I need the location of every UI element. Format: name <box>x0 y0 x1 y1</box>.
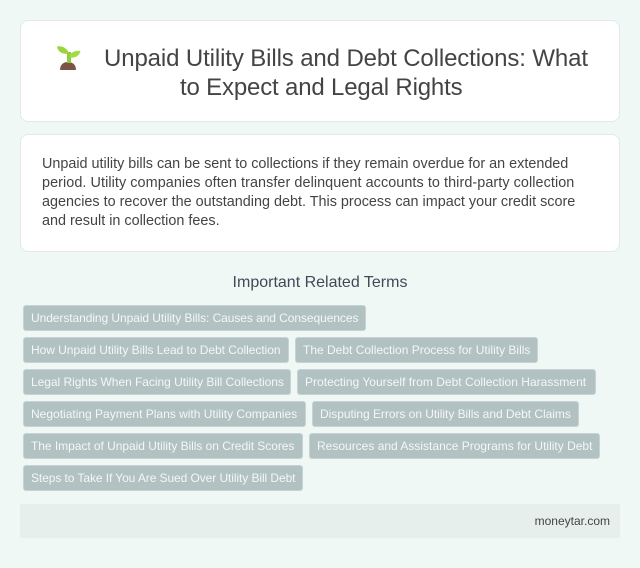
tag: Negotiating Payment Plans with Utility Companies <box>31 407 297 421</box>
icon: seedling <box>57 46 80 70</box>
tag: How Unpaid Utility Bills Lead to Debt Collection <box>31 343 281 357</box>
intro paragraph: period. Utility companies often transfer delinquent accounts to third-party collection <box>42 175 574 191</box>
title text <box>104 45 588 101</box>
tag <box>297 369 596 395</box>
title card <box>20 20 620 122</box>
intro paragraph: and result in collection fees. <box>42 213 220 229</box>
related term tags <box>23 305 600 491</box>
tag: Resources and Assistance Programs for Utility Debt <box>317 439 592 453</box>
tag <box>295 337 538 363</box>
title text: to Expect and Legal Rights <box>180 74 462 101</box>
tag <box>23 401 306 427</box>
tag <box>312 401 579 427</box>
intro paragraph: Unpaid utility bills can be sent to collections if they remain overdue for an extended <box>42 156 568 172</box>
tag: Understanding Unpaid Utility Bills: Causes and Consequences <box>31 311 358 325</box>
tag <box>23 305 366 331</box>
tag <box>23 465 303 491</box>
tag: Steps to Take If You Are Sued Over Utility Bill Debt <box>31 471 295 485</box>
intro paragraph: agencies to recover the outstanding debt. This process can impact your credit score <box>42 194 575 210</box>
tag <box>23 433 303 459</box>
title text: Unpaid Utility Bills and Debt Collections: What <box>104 45 588 72</box>
intro text card <box>20 134 620 252</box>
tag: Disputing Errors on Utility Bills and Debt Claims <box>320 407 571 421</box>
tag <box>23 337 289 363</box>
intro paragraph <box>42 156 575 229</box>
tag: The Debt Collection Process for Utility Bills <box>303 343 530 357</box>
tag: The Impact of Unpaid Utility Bills on Credit Scores <box>31 439 294 453</box>
tag: Protecting Yourself from Debt Collection Harassment <box>305 375 586 389</box>
tag: Legal Rights When Facing Utility Bill Collections <box>31 375 284 389</box>
footer source text: moneytar.com <box>535 514 610 528</box>
footer bar <box>20 504 620 538</box>
tag <box>309 433 600 459</box>
heading: related terms: Important Related Terms <box>233 274 407 291</box>
tag <box>23 369 291 395</box>
